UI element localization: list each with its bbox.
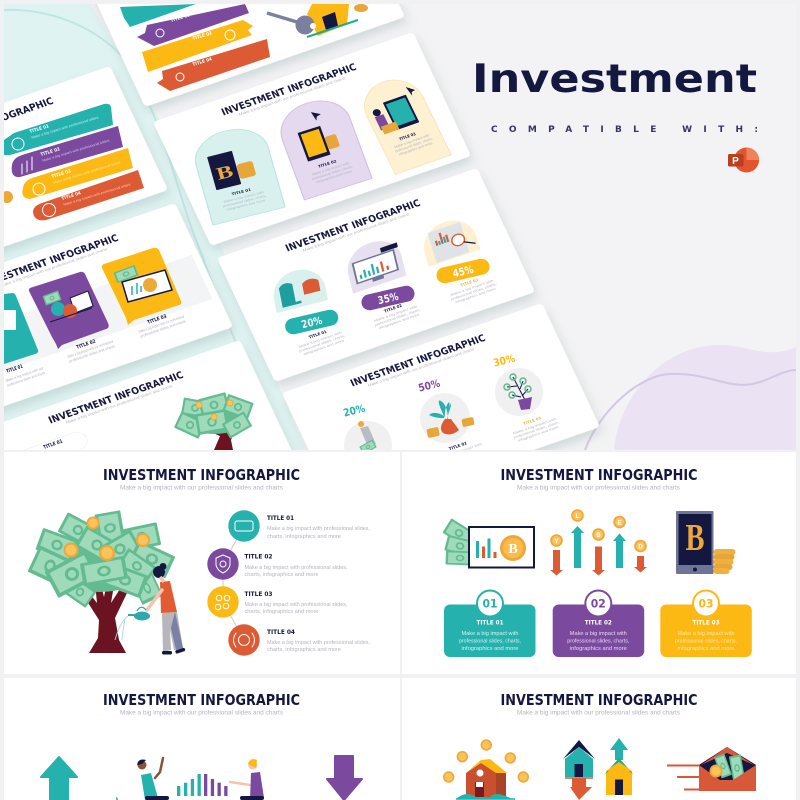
- slide subheading: Make a big impact with our professional slides and charts: [238, 76, 346, 117]
- pill 35%: [362, 286, 414, 310]
- slide subheading: Make a big impact with our professional slides and charts: [65, 384, 173, 425]
- slide 1: money tree: [4, 452, 400, 674]
- step 4: charts, infographics and more: [267, 647, 341, 653]
- subheading: Make a big impact with our professional slides and charts: [120, 710, 283, 716]
- icon: teal house with down arrow: [563, 740, 595, 800]
- caption 1: TITLE 01: [308, 329, 328, 340]
- labels for colored cards: TITLE 01: [6, 364, 24, 375]
- slide: colored cards: [0, 203, 233, 417]
- labels for colored cards: Make a big impact with our professional: [138, 315, 185, 334]
- panel: hero banner: [4, 4, 796, 450]
- card 02: TITLE 02: [585, 620, 612, 626]
- caption 1: infographics and more: [303, 339, 345, 356]
- step 2: [207, 548, 348, 580]
- card: cream arch: Make a big impact with: [394, 133, 430, 149]
- colored cards: [4, 248, 181, 364]
- rounded banners: TITLE 01: [29, 123, 50, 135]
- chart: crypto arrows: [550, 509, 647, 576]
- caption 3: professional slides, charts,: [450, 282, 497, 301]
- slide: arch cards: [153, 32, 471, 246]
- icon: PowerPoint logo: [728, 148, 759, 172]
- rounded banners: TITLE 04: [61, 190, 82, 202]
- arch 2: [348, 241, 406, 294]
- step 4: [228, 624, 371, 656]
- icon: envelope with money: [667, 747, 756, 791]
- stat 20%: [342, 403, 392, 469]
- tree trunk: [85, 581, 127, 653]
- rounded banners: TITLE 02: [40, 146, 61, 158]
- card: cream arch: TITLE 03: [398, 131, 417, 141]
- caption 1: [298, 330, 345, 355]
- rounded banners: Make a big impact with professional slides: [53, 160, 121, 185]
- arrow up: [41, 757, 77, 800]
- captions: professional slides, charts,: [513, 420, 560, 440]
- slide 3: up and down arrows: [4, 678, 400, 800]
- card 02: infographics and more: [570, 646, 627, 652]
- banners on top slide: TITLE 04: [192, 56, 213, 68]
- card: teal arch: TITLE 01: [231, 187, 252, 197]
- card 01: TITLE 01: [476, 620, 504, 626]
- card: teal arch: professional slides, charts,: [223, 194, 267, 208]
- caption 3: TITLE 03: [460, 277, 479, 288]
- chart: crypto arrows: E: [617, 520, 622, 526]
- icon: yellow house with up arrow: [604, 738, 634, 795]
- hero heading: Investment: [472, 57, 757, 102]
- banners on top slide: TITLE 03: [192, 30, 213, 42]
- caption 1: Make a big impact with: [298, 331, 343, 349]
- panel background: [402, 452, 796, 674]
- caption 1: professional slides, charts,: [298, 334, 346, 353]
- card: teal arch: Make a big impact with: [223, 191, 264, 204]
- caption 2: [374, 304, 420, 329]
- step 1: Make a big impact with professional slides,: [267, 526, 371, 532]
- labels for colored cards: TITLE 02: [76, 339, 97, 351]
- card 03: professional slides, charts,: [675, 638, 737, 644]
- step 1: TITLE 01: [267, 514, 294, 522]
- lavender curve: [585, 370, 796, 450]
- step 3: TITLE 03: [244, 590, 272, 598]
- card 03: TITLE 03: [692, 620, 720, 626]
- chart: crypto arrows: D: [638, 544, 643, 550]
- caption 2: Make a big impact with: [373, 304, 418, 323]
- title on tilted tree slide: TITLE 01: [43, 439, 64, 451]
- icon: tablet with bitcoin: B: [686, 517, 704, 559]
- chart: crypto arrows: B: [596, 533, 601, 539]
- icon: house and key: [267, 4, 368, 37]
- banners on top slide: TITLE 02: [170, 12, 191, 24]
- slide subheading: Make a big impact with our professional slides and charts: [302, 212, 410, 253]
- watering can: [115, 607, 150, 640]
- step 2: charts, infographics and more: [244, 572, 318, 578]
- labels for colored cards: Make a big impact with our: [5, 366, 45, 383]
- arch 1: [274, 270, 328, 313]
- slide: top banners: [87, 0, 405, 107]
- icon: tablet with bitcoin: [676, 511, 736, 574]
- slide heading: INVESTMENT INFOGRAPHIC: [220, 62, 358, 118]
- slide subheading: Make a big impact with our professional slides and charts: [0, 247, 108, 288]
- card: cream arch: professional slides, charts,: [394, 137, 433, 153]
- stat 30%: [492, 353, 543, 416]
- slide: percent pills: [217, 168, 535, 382]
- caption 2: professional slides, charts,: [374, 308, 421, 327]
- card: teal arch: B: [214, 161, 235, 184]
- chart: crypto arrows: L: [576, 514, 580, 520]
- banners on top slide: [120, 4, 270, 91]
- stat 20%: 20%: [342, 403, 367, 420]
- step 4: TITLE 04: [267, 628, 295, 636]
- card: lavender arch: infographics and more: [315, 169, 352, 184]
- icon: PowerPoint logo: P: [732, 156, 739, 167]
- captions: Make a big impact with: [512, 417, 557, 435]
- card: teal arch: [194, 128, 286, 226]
- card 02: [553, 590, 644, 657]
- slide 4: houses: [402, 678, 796, 800]
- card: lavender arch: [280, 100, 372, 200]
- card 02: professional slides, charts,: [567, 638, 629, 644]
- arch 3: [424, 220, 480, 267]
- icon: bills and monitor: B: [508, 542, 518, 557]
- card: lavender arch: TITLE 02: [318, 159, 337, 169]
- caption 2: TITLE 02: [383, 303, 403, 313]
- card 02: 02: [591, 596, 606, 610]
- pill 45%: [436, 258, 490, 284]
- connector lines: [223, 526, 244, 640]
- rounded banners: Make a big impact with professional slides: [31, 115, 99, 140]
- card: teal arch: infographics and more: [226, 199, 266, 211]
- card: lavender arch: professional slides, charts,: [311, 165, 353, 181]
- labels for colored cards: TITLE 03: [147, 314, 168, 326]
- step 2: Make a big impact with professional slides,: [244, 565, 348, 571]
- subheading: Make a big impact with our professional slides and charts: [120, 484, 283, 492]
- teal background blob: [4, 4, 305, 450]
- person right: [230, 759, 264, 800]
- captions: TITLE 02: [448, 441, 468, 451]
- heading: INVESTMENT INFOGRAPHIC: [500, 466, 698, 484]
- caption 2: infographics and more: [378, 313, 420, 330]
- rounded banners: Make a big impact with professional slides: [63, 182, 131, 207]
- stat 50%: 50%: [417, 378, 442, 395]
- slide: four rounded banners: [4, 67, 170, 256]
- labels for colored cards: professional slides and charts: [7, 371, 46, 388]
- icon: bills and monitor: [442, 518, 534, 568]
- caption 3: infographics and more: [455, 287, 497, 304]
- pill 20%: [285, 310, 338, 334]
- heading: INVESTMENT INFOGRAPHIC: [103, 691, 300, 709]
- step 3: Make a big impact with professional slides,: [244, 602, 348, 608]
- caption 3: [450, 278, 496, 304]
- step 2: TITLE 02: [244, 552, 272, 560]
- card 03: Make a big impact with: [678, 631, 735, 637]
- card: lavender arch: Make a big impact with: [311, 161, 350, 176]
- labels for colored cards: [5, 314, 186, 388]
- slide heading: INVESTMENT INFOGRAPHIC: [349, 333, 487, 389]
- step 3: [207, 586, 348, 618]
- subheading: Make a big impact with our professional slides and charts: [517, 710, 680, 716]
- arrow down: [327, 756, 362, 800]
- subheading: Make a big impact with our professional slides and charts: [517, 484, 680, 492]
- card 01: Make a big impact with: [462, 631, 519, 637]
- card 01: 01: [482, 596, 498, 610]
- heading: INVESTMENT INFOGRAPHIC: [103, 466, 300, 484]
- card 01: professional slides, charts,: [459, 638, 521, 644]
- pill 45%: 45%: [452, 264, 475, 280]
- step 1: [228, 510, 371, 542]
- card 01: infographics and more: [462, 646, 519, 652]
- lavender blob: [614, 345, 796, 450]
- card: cream arch: [364, 80, 452, 175]
- card 01: [444, 590, 536, 657]
- rounded banners: TITLE 03: [51, 168, 72, 180]
- heading: INVESTMENT INFOGRAPHIC: [500, 691, 698, 709]
- labels for colored cards: professional slides and charts: [69, 344, 115, 364]
- bar chart: [177, 774, 228, 796]
- caption 3: Make a big impact with: [450, 279, 494, 297]
- panel background: [4, 452, 400, 674]
- teal background arc: [4, 9, 236, 342]
- captions: infographics and more: [517, 425, 559, 443]
- step 1: charts, infographics and more: [267, 534, 341, 540]
- chart: crypto arrows: Y: [554, 539, 559, 545]
- panel background: [402, 678, 796, 800]
- card 03: infographics and more: [678, 646, 735, 652]
- card 03: [660, 590, 752, 657]
- icon: house and coins: [443, 739, 529, 799]
- money foliage: [28, 510, 175, 608]
- pill 35%: 35%: [377, 291, 400, 307]
- captions: [435, 410, 562, 469]
- slide heading: INVESTMENT INFOGRAPHIC: [47, 370, 185, 426]
- slide: tree percentages: [284, 304, 604, 450]
- rounded banners: [1, 104, 144, 220]
- pill outline: [11, 430, 90, 471]
- step 3: charts, infographics and more: [244, 609, 318, 615]
- captions: Make a big impact with: [438, 442, 483, 460]
- plant sprout: [116, 797, 118, 800]
- labels for colored cards: professional slides and charts: [140, 319, 186, 339]
- card 02: Make a big impact with: [570, 631, 627, 637]
- person left: [137, 758, 169, 800]
- tilted tree: [174, 392, 254, 450]
- hero background: [4, 4, 796, 450]
- panel background: [4, 678, 400, 800]
- stat 50%: [417, 378, 475, 443]
- slide: money tree (tilted): [0, 340, 298, 554]
- slide heading: INVESTMENT INFOGRAPHIC: [284, 198, 422, 254]
- labels for colored cards: Make a big impact with our professional: [67, 340, 114, 359]
- card 03: 03: [698, 596, 714, 610]
- rounded banners: Make a big impact with professional slides: [42, 138, 110, 163]
- grey band: [4, 255, 212, 371]
- gardener figure: [147, 563, 186, 654]
- slide subheading: Make a big impact with our professional slides and charts: [367, 347, 475, 388]
- pill 20%: 20%: [300, 315, 324, 331]
- captions: TITLE 03: [522, 416, 542, 426]
- card: cream arch: infographics and more: [398, 141, 433, 157]
- compatibility label: COMPATIBLE WITH:: [491, 125, 758, 135]
- step 4: Make a big impact with professional slides,: [267, 640, 371, 646]
- slide 2: three numbered cards: [402, 452, 796, 674]
- stat 30%: 30%: [492, 353, 517, 370]
